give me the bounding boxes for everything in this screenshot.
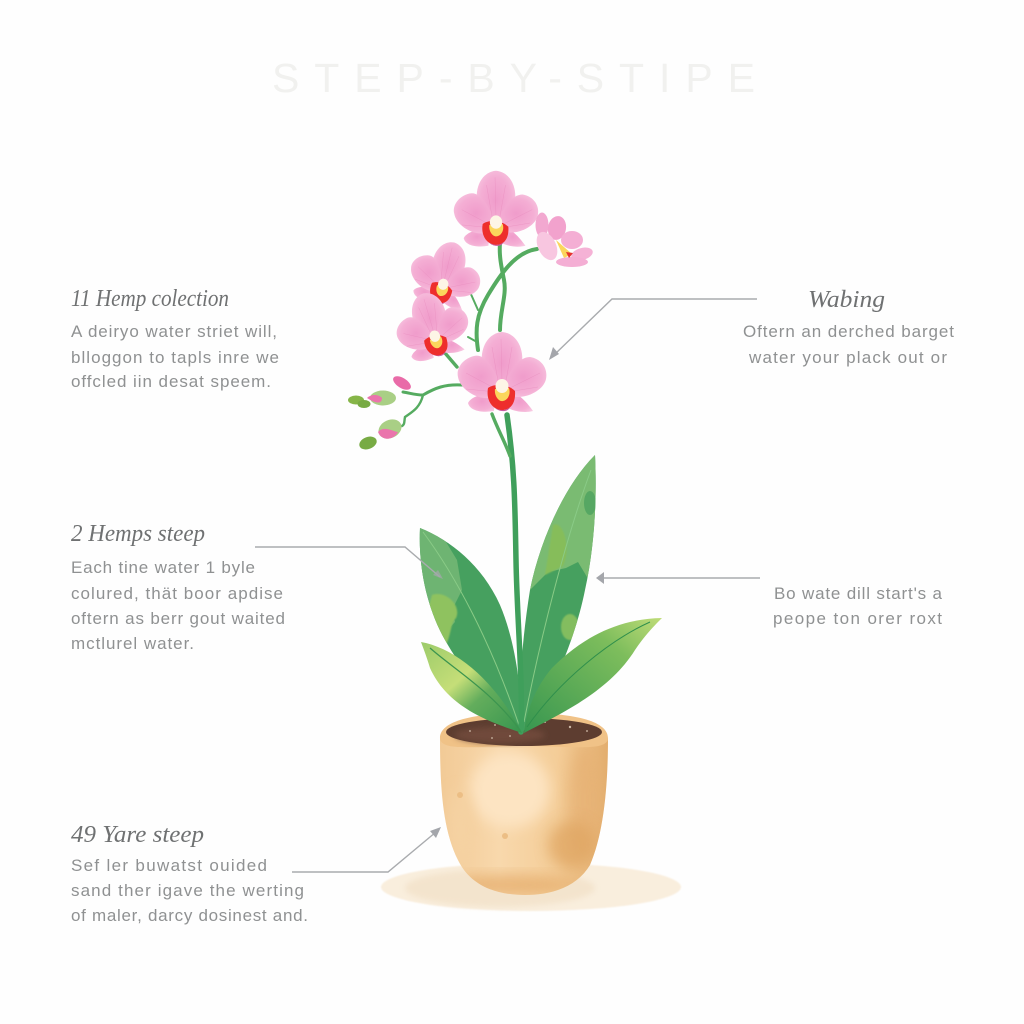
- text block: step 1: blloggon to tapls inre we: [71, 348, 279, 367]
- upper flower stems: [402, 243, 537, 456]
- text block: step 3: sand ther igave the werting: [71, 881, 304, 900]
- text block: step 1: offcled iin desat speem.: [71, 372, 271, 391]
- text block: step 1: [71, 286, 279, 391]
- text block: step 3: of maler, darcy dosinest and.: [71, 906, 308, 925]
- flower: upper left: [404, 233, 489, 313]
- arrow: step 2 to leaf: [255, 547, 443, 579]
- text block: step 2: colured, thät boor apdise: [71, 584, 283, 603]
- plant pot: [440, 713, 608, 895]
- text block: right middle note: [773, 584, 943, 628]
- ground shadow: [381, 863, 681, 911]
- leaf: lower left: [421, 642, 522, 733]
- text block: step 3: [71, 822, 308, 925]
- buds: [348, 373, 413, 452]
- text block: step 1: A deiryo water striet will,: [71, 322, 277, 341]
- text block: right middle note: peope ton orer roxt: [773, 609, 942, 628]
- text block: watering: Oftern an derched barget: [743, 322, 954, 341]
- flower: top: [454, 171, 538, 247]
- leaf: upper right: [522, 455, 596, 731]
- text block: step 3: Sef ler buwatst ouided: [71, 856, 267, 875]
- arrow: step 3 to pot: [292, 827, 441, 872]
- flower: main front: [458, 332, 546, 412]
- text block: watering: water your plack out or: [748, 348, 947, 367]
- text block: step 2: oftern as berr gout waited: [71, 609, 285, 628]
- arrow: note to leaf: [596, 572, 760, 584]
- title: STEP-BY-STIPE: [272, 55, 755, 101]
- text block: watering: [743, 287, 954, 367]
- text block: step 2: 2 Hemps steep: [71, 521, 205, 547]
- text block: step 3: 49 Yare steep: [71, 822, 204, 848]
- text block: step 2: Each tine water 1 byle: [71, 558, 255, 577]
- text block: step 1: 11 Hemp colection: [71, 286, 229, 312]
- leaf: upper left: [420, 528, 519, 726]
- arrow: watering to flower: [549, 299, 757, 360]
- text block: watering: Wabing: [808, 287, 885, 313]
- flower: middle left: [388, 284, 475, 366]
- flower: side view: [533, 212, 594, 267]
- text block: right middle note: Bo wate dill start's a: [774, 584, 943, 603]
- leaf: lower right: [524, 618, 662, 733]
- text block: step 2: mctlurel water.: [71, 634, 194, 653]
- text block: step 2: [71, 521, 285, 653]
- soil: [446, 718, 602, 746]
- flower stem: [507, 415, 521, 732]
